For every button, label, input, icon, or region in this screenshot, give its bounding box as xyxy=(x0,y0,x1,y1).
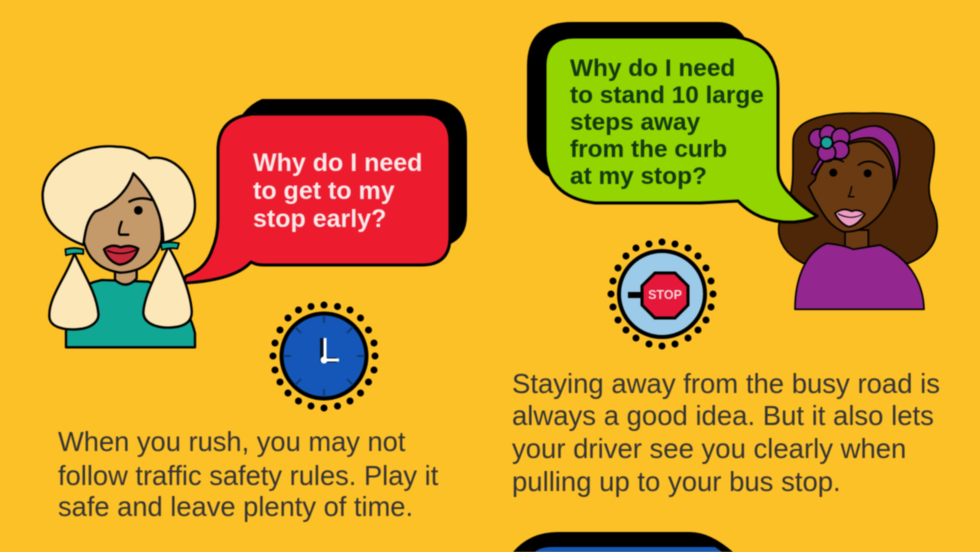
red bubble question text: stop early? xyxy=(253,205,386,233)
green speech bubble xyxy=(527,22,817,222)
panel: red question xyxy=(43,99,467,522)
next blue speech bubble, cropped at the bottom xyxy=(513,532,733,552)
red panel explanation text: safe and leave plenty of time. xyxy=(58,491,413,522)
green bubble question text: at my stop? xyxy=(570,163,707,190)
red panel explanation text: When you rush, you may not xyxy=(58,426,406,457)
red bubble question text: to get to my xyxy=(253,177,395,205)
character: blonde girl xyxy=(43,146,195,347)
green panel explanation text: your driver see you clearly when xyxy=(512,433,906,464)
green bubble question text: Why do I need xyxy=(570,55,735,82)
panel: green question xyxy=(512,22,940,497)
green panel explanation text: Staying away from the busy road is xyxy=(512,368,940,399)
character: woman with flower xyxy=(779,113,937,309)
red speech bubble xyxy=(184,99,467,283)
green panel explanation text: pulling up to your bus stop. xyxy=(512,466,841,497)
green bubble question text: from the curb xyxy=(570,136,727,163)
red panel explanation text: follow traffic safety rules. Play it xyxy=(58,460,439,491)
green bubble question text: to stand 10 large xyxy=(570,82,764,109)
red bubble question text: Why do I need xyxy=(253,149,422,177)
green panel explanation text: always a good idea. But it also lets xyxy=(512,400,934,431)
green bubble question text: steps away xyxy=(570,109,701,136)
icon: stop sign xyxy=(608,238,716,350)
icon: stop sign: STOP xyxy=(648,288,682,302)
icon: clock xyxy=(270,302,378,412)
